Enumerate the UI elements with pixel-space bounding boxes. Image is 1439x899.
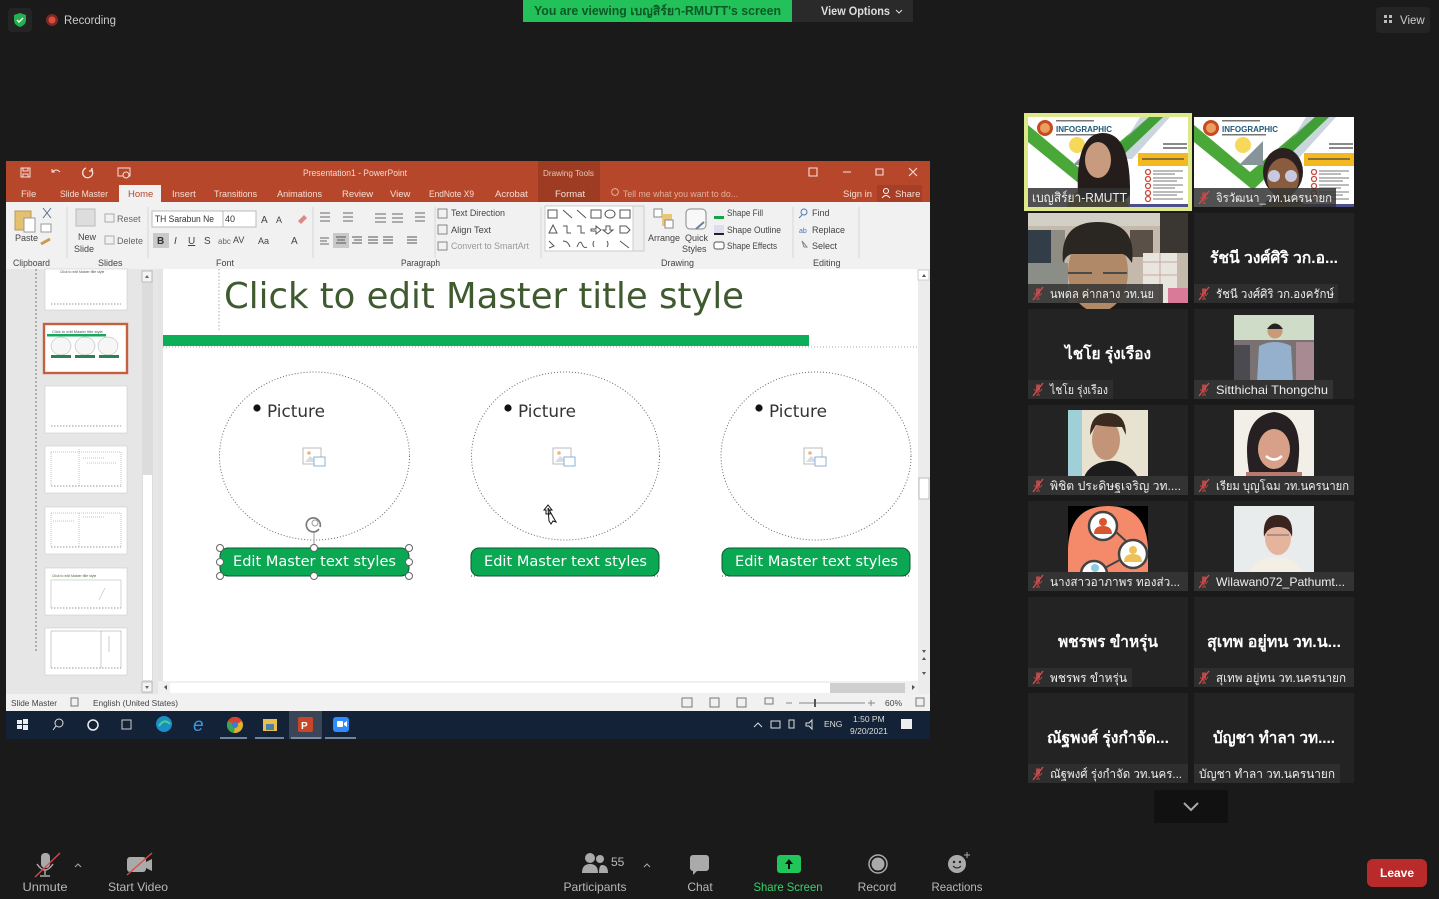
unmute button: [22, 853, 81, 894]
button: edit master text 2: Edit Master text styles: [484, 554, 647, 570]
tile: พชรพร ขำหรุ่น: พชรพร ขำหรุ่น: [1050, 671, 1127, 686]
ribbon tabs: Share: [895, 189, 920, 200]
tile: นพดล ค่ากลาง วท.นย: [1028, 213, 1188, 312]
reactions button: Reactions: [932, 880, 982, 894]
chat button: Chat: [687, 880, 713, 894]
ribbon tabs: Format: [555, 189, 585, 200]
start and taskbar icons: e: [193, 715, 204, 736]
leave button: Leave: [1380, 866, 1414, 880]
status bar: Slide Master: [11, 698, 57, 708]
start and taskbar icons: [17, 715, 356, 738]
tile: เรียม บุญโฉม: เรียม บุญโฉม วท.นครนายก: [1216, 479, 1349, 494]
ribbon: font group: AV: [233, 235, 244, 245]
ribbon: drawing group: [545, 206, 781, 268]
tile: ไชโย รุ่งเรือง: [1028, 309, 1188, 399]
tile: พชรพร ขำหรุ่น: พชรพร ขำหรุ่น: [1058, 633, 1158, 652]
ribbon tabs: Slide Master: [60, 189, 108, 200]
ribbon: font group: A: [291, 236, 298, 247]
panel: meeting toolbar: [22, 852, 1427, 894]
tile: ณัฐพงศ์ รุ่งกำจัด: ณัฐพงศ์ รุ่งกำจัด วท.นคร...: [1050, 767, 1182, 782]
speaker tile: เบญสิร์ยา-RMUTT: เบญสิร์ยา-RMUTT: [1032, 190, 1127, 205]
tile: ไชโย รุ่งเรือง: ไชโย รุ่งเรือง: [1063, 343, 1151, 364]
tile: บัญชา ทำลา: บัญชา ทำลา วท.นครนายก: [1199, 767, 1335, 781]
participants button: 55: [611, 855, 625, 869]
ribbon tabs: File: [21, 189, 36, 200]
title bar: Presentation1 - PowerPoint: [303, 168, 407, 179]
icon: security shield: [8, 8, 32, 32]
picture placeholder 2: [472, 372, 660, 540]
button: edit master text 1 (selected): [216, 518, 412, 580]
screen share banner: You are viewing เบญสิร์ยา-RMUTT's screen: [534, 3, 781, 18]
slide thumbnails: Click to edit Master title style: [52, 329, 103, 334]
participants button: [564, 853, 650, 894]
tile: ไชโย รุ่งเรือง: ไชโย รุ่งเรือง: [1049, 383, 1108, 398]
ribbon: font group: I: [174, 236, 177, 247]
tile: เรียม บุญโฉม: [1194, 405, 1354, 495]
tile: นางสาวอาภาพร: นางสาวอาภาพร ทองส่ว...: [1050, 575, 1180, 589]
ribbon tabs: EndNote X9: [429, 189, 474, 200]
tile: จิรวัฒนา_วท.นครนายก: จิรวัฒนา_วท.นครนายก: [1216, 191, 1332, 205]
view layout button: View: [1400, 15, 1425, 27]
ribbon tabs: Acrobat: [495, 189, 528, 200]
picture placeholder 3: [721, 372, 911, 540]
chat button: [687, 855, 713, 894]
tile: สุเทพ อยู่ทน: สุเทพ อยู่ทน วท.นครนายก: [1216, 671, 1346, 686]
ribbon: paragraph group: Align Text: [451, 225, 492, 235]
ribbon: paragraph group: [320, 208, 529, 268]
ribbon: font group: A: [261, 215, 268, 226]
ribbon tabs: Insert: [172, 189, 196, 200]
record button: [858, 855, 896, 894]
ribbon: paragraph group: Paragraph: [401, 258, 440, 268]
ribbon: drawing group: Shape Effects: [727, 241, 777, 251]
tile: Sitthichai Thongchu: Sitthichai Thongchu: [1216, 383, 1328, 397]
tile: จิรวัฒนา_วท.นครนายก: INFOGRAPHIC: [1222, 125, 1278, 134]
mouse cursor: [544, 505, 556, 524]
tile: บัญชา ทำลา: [1194, 693, 1354, 783]
button: edit master text 2: [471, 548, 659, 576]
tile: นางสาวอาภาพร: [1028, 501, 1188, 591]
system tray: ENG: [824, 719, 842, 729]
tile: สุเทพ อยู่ทน: สุเทพ อยู่ทน วท.น...: [1207, 634, 1341, 653]
ribbon: editing group: Replace: [812, 225, 845, 235]
ribbon: drawing group: Drawing: [661, 258, 694, 268]
record button: Record: [858, 880, 896, 894]
view layout button: [1376, 7, 1430, 33]
tile: ณัฐพงศ์ รุ่งกำจัด: ณัฐพงศ์ รุ่งกำจัด...: [1047, 728, 1169, 748]
picture placeholder 2: Picture: [518, 402, 576, 422]
ribbon: drawing group: Shape Outline: [727, 225, 781, 235]
ribbon: clipboard group: Clipboard: [13, 258, 50, 268]
tile: พชรพร ขำหรุ่น: [1028, 597, 1188, 687]
panel: participant gallery: [1024, 113, 1354, 823]
start and taskbar icons: P: [301, 721, 308, 732]
slide thumbnails: Click to edit Master title style: [52, 574, 96, 578]
tile: รัชนี วงศ์ศิริ: รัชนี วงศ์ศิริ วก.องครักษ์: [1216, 287, 1334, 301]
windows taskbar: [6, 711, 930, 739]
ribbon: editing group: Find: [812, 208, 830, 218]
ribbon: font group: TH Sarabun Ne: [155, 214, 214, 224]
view options menu: View Options: [821, 6, 890, 18]
ribbon: slides group: [74, 209, 143, 268]
ribbon tabs: Animations: [277, 189, 322, 200]
ribbon tabs: [21, 185, 922, 202]
ribbon: clipboard group: [13, 208, 51, 268]
speaker tile: เบญสิร์ยา-RMUTT: [1024, 113, 1192, 211]
speaker tile: เบญสิร์ยา-RMUTT: INFOGRAPHIC: [1056, 125, 1112, 134]
start video button: [108, 853, 168, 894]
status bar: 60%: [885, 698, 902, 708]
ribbon: paragraph group: Text Direction: [451, 208, 505, 218]
button: edit master text 3: Edit Master text styles: [735, 554, 898, 570]
tile: รัชนี วงศ์ศิริ: รัชนี วงศ์ศิริ วก.อ...: [1210, 248, 1338, 267]
tile: รัชนี วงศ์ศิริ: [1194, 213, 1354, 303]
slide title: Click to edit Master title style: [224, 276, 744, 317]
ribbon: drawing group: Arrange: [648, 233, 680, 243]
thumbnail scrollbar: [142, 270, 153, 694]
ribbon tabs: Review: [342, 189, 373, 200]
button: edit master text 1 (selected): Edit Master text styles: [233, 554, 396, 570]
slide thumbnails: Click to edit Master title style: [60, 270, 104, 274]
share screen button: Share Screen: [754, 880, 822, 894]
ribbon tabs: Sign in: [843, 189, 872, 200]
title bar: Drawing Tools: [543, 168, 594, 178]
slide thumbnails: [44, 269, 127, 675]
ribbon: font group: 40: [225, 214, 235, 224]
ribbon: slides group: Reset: [117, 214, 141, 224]
ribbon: drawing group: Shape Fill: [727, 208, 763, 218]
ribbon: font group: Font: [216, 258, 235, 268]
ribbon tabs: Home: [128, 189, 153, 200]
thumbnail pane: [6, 269, 158, 694]
ribbon: font group: A: [276, 215, 282, 225]
system tray: 9/20/2021: [850, 726, 888, 736]
ribbon: font group: U: [188, 236, 195, 247]
ribbon: drawing group: Styles: [682, 244, 707, 254]
recording indicator: [46, 14, 116, 27]
status bar: English (United States): [93, 698, 178, 708]
ribbon: font group: [152, 211, 307, 268]
ribbon: font group: Aa: [258, 236, 269, 246]
tile: สุเทพ อยู่ทน: [1194, 597, 1354, 687]
ribbon: editing group: Select: [812, 241, 838, 251]
system tray: 1:50 PM: [853, 714, 885, 724]
tile: Wilawan072_Pathumt...: [1194, 501, 1354, 591]
start video button: Start Video: [108, 880, 168, 894]
ribbon: font group: S: [204, 236, 211, 247]
button: edit master text 3: [722, 548, 910, 576]
tile: นพดล ค่ากลาง วท.นย: นพดล ค่ากลาง วท.นย: [1050, 287, 1154, 301]
ribbon tabs: Tell me what you want to do...: [623, 189, 738, 200]
status bar: [6, 694, 930, 711]
ribbon: slides group: New: [78, 232, 97, 242]
system tray: [754, 714, 912, 736]
picture placeholder 3: Picture: [769, 402, 827, 422]
tile: Wilawan072_Pathumt...: Wilawan072_Pathumt...: [1216, 575, 1345, 589]
screen share banner: [523, 0, 792, 22]
ribbon tabs: Transitions: [214, 189, 257, 200]
picture placeholder 1: [220, 372, 410, 540]
gallery next-page arrow: [1154, 790, 1228, 823]
ribbon: slides group: Slides: [98, 258, 123, 268]
tile: จิรวัฒนา_วท.นครนายก: [1194, 117, 1354, 207]
unmute button: Unmute: [22, 880, 68, 894]
tile: ณัฐพงศ์ รุ่งกำจัด: [1028, 693, 1188, 783]
picture placeholder 1: Picture: [267, 402, 325, 422]
ribbon: clipboard group: Paste: [15, 233, 38, 243]
ribbon: slides group: Delete: [117, 236, 143, 246]
participants button: Participants: [564, 880, 626, 894]
slide canvas: [158, 269, 918, 681]
ribbon: paragraph group: Convert to SmartArt: [451, 241, 529, 251]
share screen button: [754, 855, 822, 894]
tile: พิชิต ประดิษฐเจริญ: [1028, 405, 1188, 495]
tile: บัญชา ทำลา: บัญชา ทำลา วท....: [1213, 729, 1335, 748]
leave button: [1367, 859, 1427, 887]
ribbon tabs: View: [390, 189, 411, 200]
slide scrollbars: [158, 269, 930, 694]
ribbon: editing group: [799, 208, 845, 268]
panel: PowerPoint window: [6, 161, 930, 739]
ribbon: drawing group: Quick: [685, 233, 709, 243]
title bar: [6, 161, 930, 202]
green title bar: [163, 335, 809, 346]
ribbon: editing group: ab: [799, 228, 807, 235]
ribbon: font group: B: [157, 236, 164, 247]
view options menu: [792, 0, 913, 22]
recording indicator: Recording: [64, 15, 116, 27]
ribbon: font group: abc: [218, 237, 231, 246]
tile: พิชิต ประดิษฐเจริญ: พิชิต ประดิษฐเจริญ วท....: [1050, 479, 1181, 493]
ribbon: editing group: Editing: [813, 258, 841, 268]
ribbon: slides group: Slide: [74, 244, 94, 254]
tile: Sitthichai Thongchu: [1194, 309, 1354, 399]
reactions button: [932, 852, 982, 894]
